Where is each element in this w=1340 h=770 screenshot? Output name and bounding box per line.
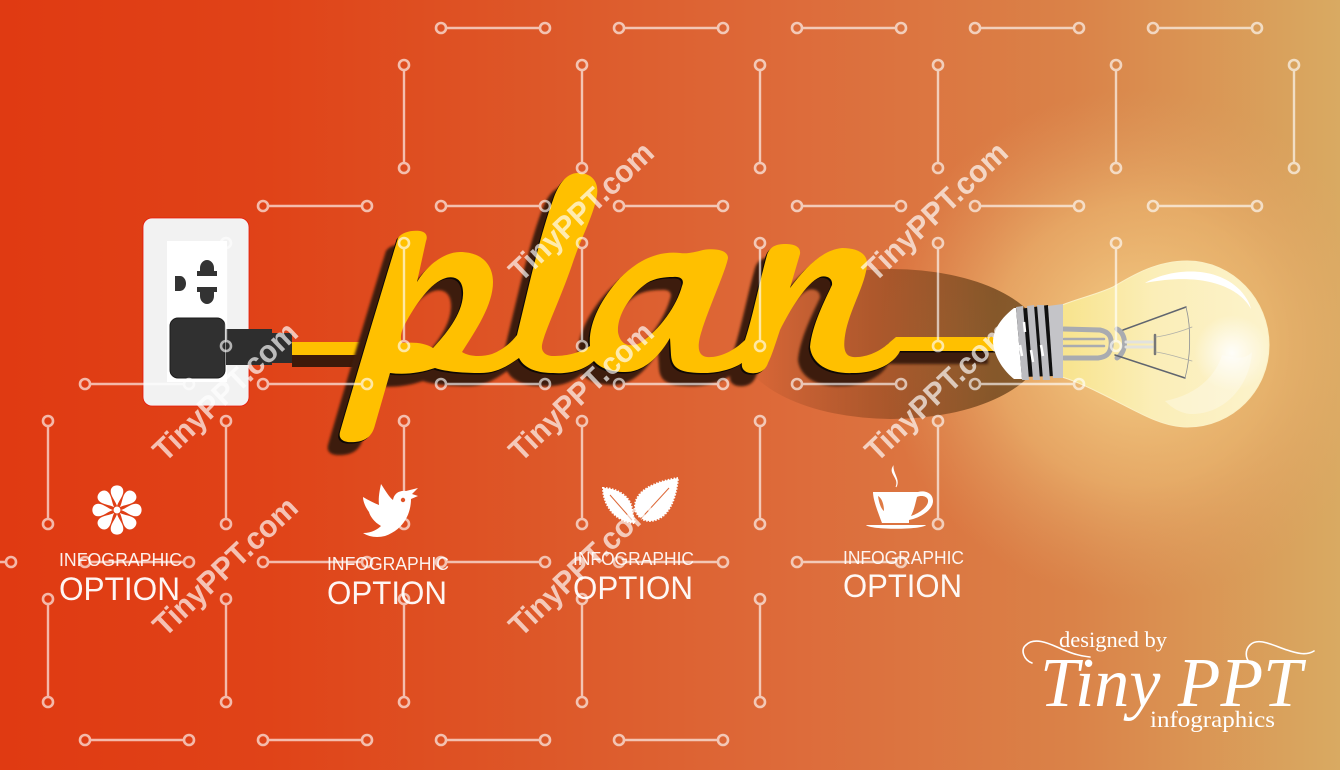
option 2 <box>327 484 449 611</box>
wall socket <box>143 218 292 406</box>
filament support <box>1064 307 1192 378</box>
background glow around the bulb <box>860 70 1340 620</box>
option 3 <box>573 478 694 606</box>
bulb screw base <box>993 304 1063 380</box>
designed by: designed by <box>1059 627 1167 652</box>
watermark 5: TinyPPT.com <box>858 315 1017 468</box>
socket holes <box>175 260 217 304</box>
option 3 label: INFOGRAPHIC <box>573 549 694 569</box>
icon: coffee cup <box>866 467 933 529</box>
watermark 2: TinyPPT.com <box>502 135 661 288</box>
watermark 6: TinyPPT.com <box>146 490 305 643</box>
light bulb <box>993 261 1270 427</box>
option 2 label: INFOGRAPHIC <box>327 554 449 574</box>
lower reflection <box>1165 352 1252 414</box>
bulb inner glow <box>1194 315 1270 391</box>
icon: flower <box>92 485 142 535</box>
socket plate <box>143 218 249 406</box>
bulb glass <box>1062 261 1269 427</box>
option 1 title: OPTION <box>59 571 180 607</box>
option 1 label: INFOGRAPHIC <box>59 550 182 570</box>
watermarks <box>146 135 1017 643</box>
left cable shadow <box>292 355 362 367</box>
socket inner face <box>167 241 227 382</box>
word edge <box>338 174 998 444</box>
left cable <box>292 342 364 355</box>
option 1 <box>59 485 182 607</box>
watermark 4: TinyPPT.com <box>502 315 661 468</box>
icon: leaves <box>603 478 678 524</box>
option 3 title: OPTION <box>573 570 693 606</box>
shadow cast behind the wire <box>740 269 1044 419</box>
icon: bird <box>363 484 418 537</box>
option 2 title: OPTION <box>327 575 447 611</box>
word plan in cable form <box>328 173 1000 455</box>
option 4 <box>843 467 964 604</box>
infographics: infographics <box>1150 707 1275 732</box>
plug cord housing <box>226 329 292 365</box>
watermark 7: TinyPPT.com <box>502 490 661 643</box>
brand signature <box>1023 627 1314 732</box>
upper reflection <box>1145 272 1251 309</box>
option 4 label: INFOGRAPHIC <box>843 548 964 568</box>
decorative flourishes <box>1023 641 1314 663</box>
word shadow <box>328 186 988 455</box>
watermark 1: TinyPPT.com <box>146 315 305 468</box>
word fill: plan <box>340 173 1000 442</box>
watermark 3: TinyPPT.com <box>856 135 1015 288</box>
option 4 title: OPTION <box>843 568 962 604</box>
plug body <box>170 318 225 378</box>
Tiny PPT script: Tiny PPT <box>1040 645 1307 722</box>
